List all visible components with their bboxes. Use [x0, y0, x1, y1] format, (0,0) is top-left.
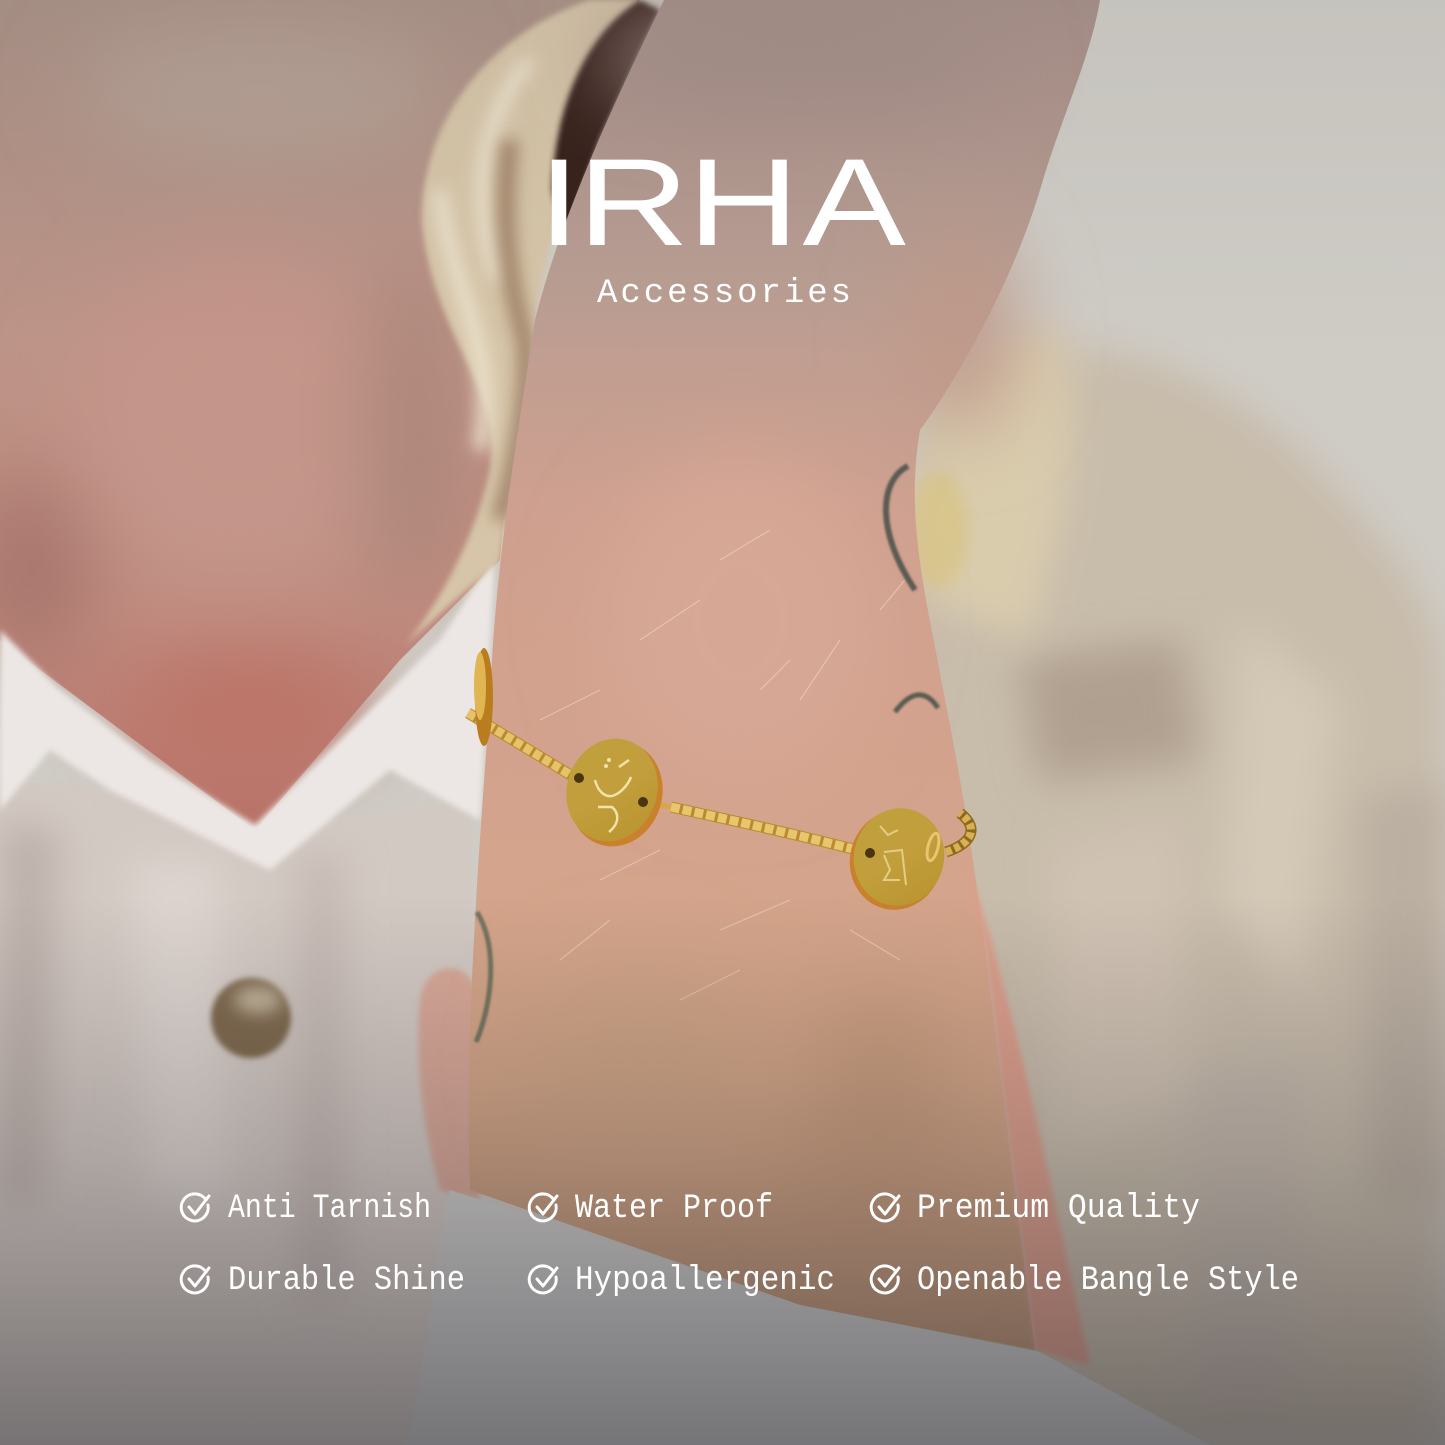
- skin hair texture: [540, 530, 905, 1000]
- feature: Water Proof: Water Proof: [575, 1190, 773, 1228]
- feature: Hypoallergenic: Hypoallergenic: [575, 1262, 835, 1300]
- shirt collar: [0, 555, 495, 870]
- hair lowlights: [500, 140, 526, 520]
- shirt folds: [0, 820, 345, 1300]
- fingertip behind wrist: [418, 968, 480, 1200]
- feature list: [181, 1190, 1299, 1300]
- forearm tattoo arc: [895, 695, 938, 712]
- bracelet: [468, 648, 971, 920]
- shirt body: [0, 780, 480, 1445]
- shirt sleeve: [405, 1190, 1210, 1445]
- cardigan on the right: [900, 348, 1445, 1445]
- forearm and hand: [469, 0, 1100, 1350]
- feature: Anti Tarnish: Anti Tarnish: [228, 1190, 431, 1228]
- brand title: [538, 133, 906, 313]
- subtitle: Accessories: Accessories: [597, 275, 851, 313]
- centre disc: [553, 727, 676, 859]
- feature: Openable Bangle Style: Openable Bangle Style: [917, 1262, 1299, 1300]
- feature: Durable Shine: Durable Shine: [228, 1262, 465, 1300]
- feature: Premium Quality: Premium Quality: [917, 1190, 1200, 1228]
- shirt button: [211, 978, 291, 1058]
- palm edge: [965, 860, 1090, 1365]
- lower tattoo: [476, 912, 491, 1042]
- side disc: [474, 648, 493, 746]
- title: IRHA: IRHA: [538, 133, 906, 272]
- right disc: [839, 799, 955, 920]
- blond hair on the right shoulder: [920, 328, 1072, 640]
- hair highlights: [440, 60, 530, 450]
- feature: Anti Tarnish: [181, 1190, 431, 1228]
- blond hair: [405, 0, 640, 645]
- bracelet chain: [468, 713, 971, 853]
- wrist tattoo: [886, 466, 915, 590]
- forearm shading: [530, 10, 1015, 1280]
- neck shading: [0, 20, 450, 770]
- cardigan folds: [1020, 620, 1445, 1400]
- neck skin: [0, 0, 640, 830]
- dark hair behind wrist: [552, 0, 660, 240]
- earring blur: [908, 472, 968, 588]
